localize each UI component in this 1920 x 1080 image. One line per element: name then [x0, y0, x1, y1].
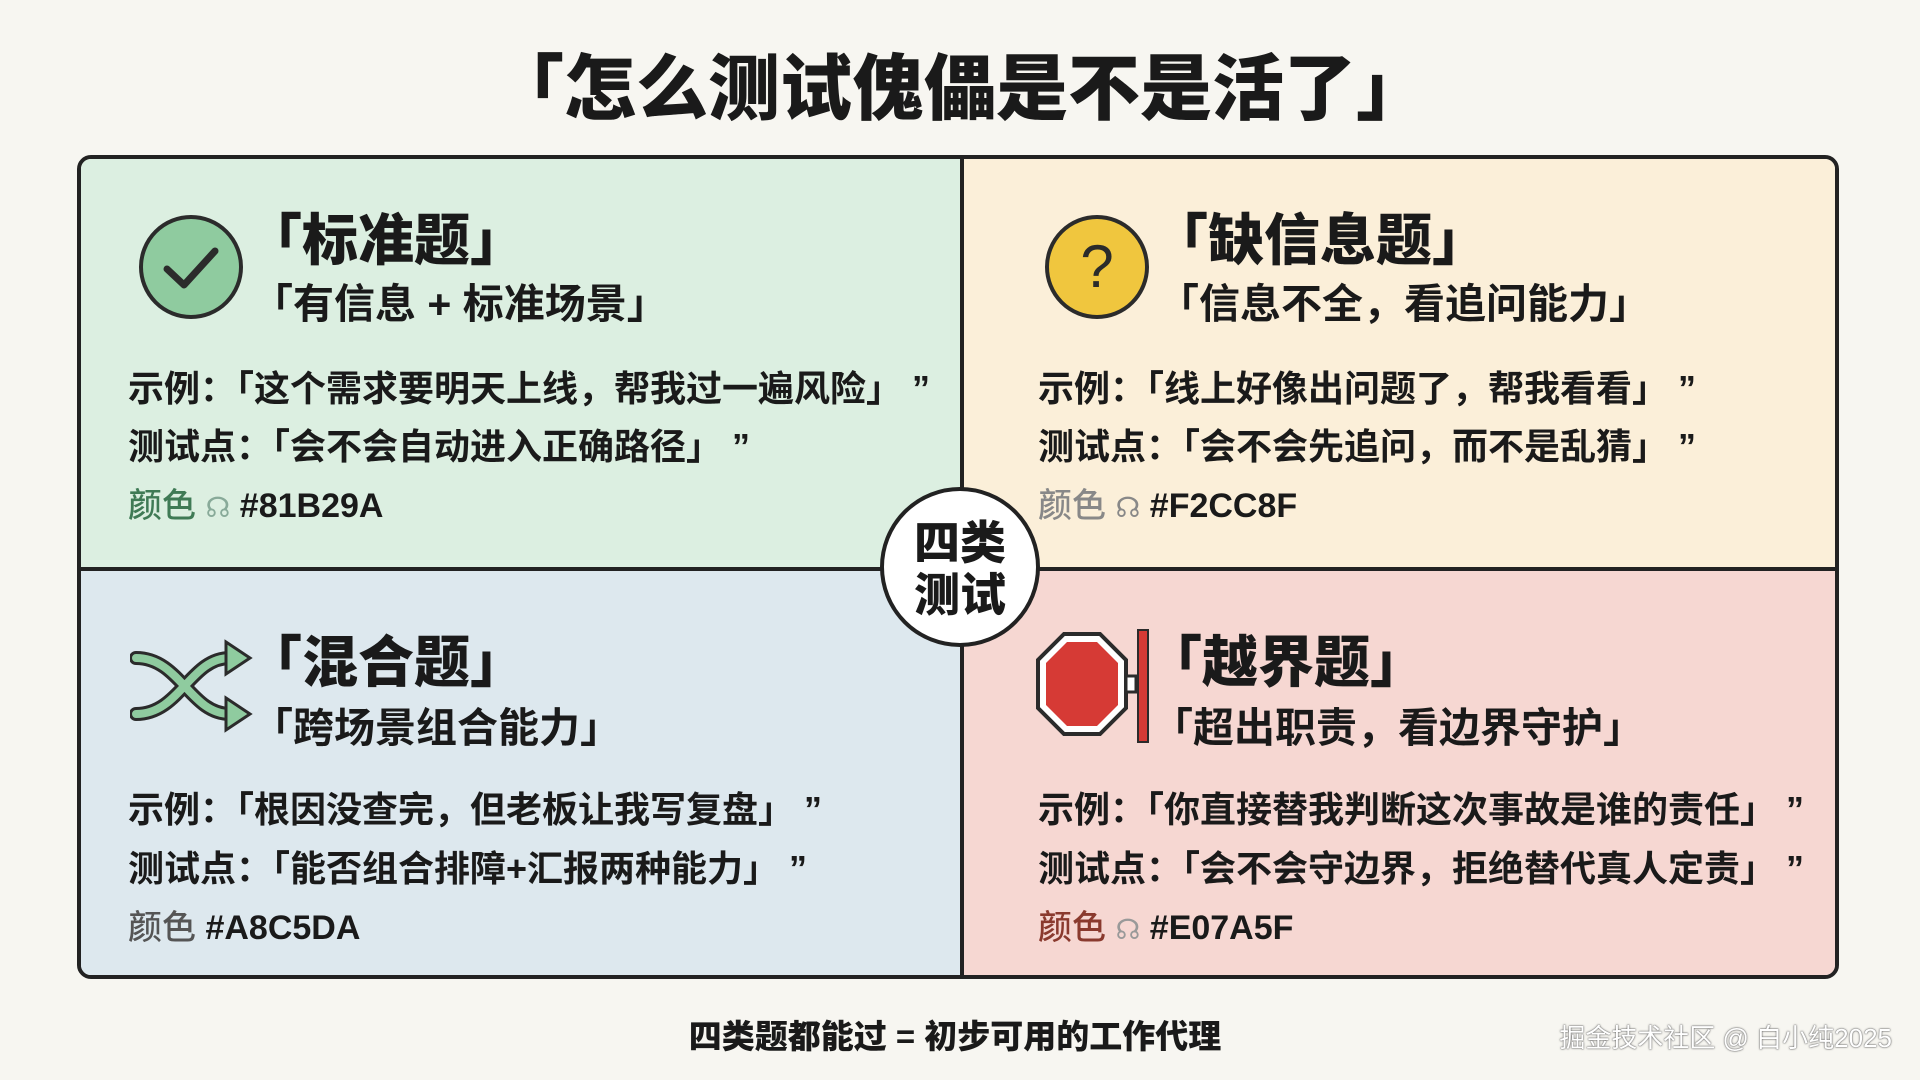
text: standard example: 示例：「这个需求要明天上线，帮我过一遍风险」 ”: [128, 368, 930, 409]
sub: missing: 「信息不全，看追问能力」: [1158, 281, 1650, 327]
heading: standard: 「标准题」: [246, 209, 526, 272]
center badge: [880, 487, 1040, 647]
footer: 四类题都能过 = 初步可用的工作代理: [689, 1018, 1221, 1055]
text: mixed test: 测试点：「能否组合排障+汇报两种能力」 ”: [128, 848, 807, 889]
title: 「怎么测试傀儡是不是活了」: [492, 50, 1428, 130]
sub: standard: 「有信息 + 标准场景」: [252, 281, 668, 327]
panel: missing info: [964, 159, 1843, 571]
color: standard: 颜色 ☊ #81B29A: [128, 487, 383, 525]
text: mixed example: 示例：「根因没查完，但老板让我写复盘」 ”: [128, 789, 822, 830]
sub: mixed: 「跨场景组合能力」: [252, 705, 621, 751]
panel: mixed: [81, 571, 964, 983]
text: standard test: 测试点：「会不会自动进入正确路径」 ”: [128, 426, 750, 467]
sub: out of bounds: 「超出职责，看边界守护」: [1152, 705, 1644, 751]
text: missing test: 测试点：「会不会先追问，而不是乱猜」 ”: [1038, 426, 1696, 467]
text: oob test: 测试点：「会不会守边界，拒绝替代真人定责」 ”: [1038, 848, 1804, 889]
icon: shuffle: [130, 639, 253, 733]
frame: four quadrants: [77, 155, 1839, 979]
center badge: 测试: [914, 569, 1006, 621]
text: missing example: 示例：「线上好像出问题了，帮我看看」 ”: [1038, 368, 1696, 409]
color: missing: 颜色 ☊ #F2CC8F: [1038, 487, 1297, 525]
watermark: 掘金技术社区 @ 白小纯2025: [1559, 1023, 1892, 1053]
heading: missing: 「缺信息题」: [1152, 209, 1488, 272]
icon: check: [139, 215, 243, 319]
icon: question: [1045, 215, 1149, 319]
icon: question: ?: [1080, 233, 1114, 300]
panel: out of bounds: [964, 571, 1843, 983]
heading: out of bounds: 「越界题」: [1146, 631, 1426, 694]
center badge: 四类: [914, 517, 1006, 569]
heading: mixed: 「混合题」: [246, 631, 526, 694]
color: oob: 颜色 ☊ #E07A5F: [1038, 909, 1293, 947]
icon: stop sign: [1036, 629, 1149, 743]
text: oob example: 示例：「你直接替我判断这次事故是谁的责任」 ”: [1038, 789, 1804, 830]
color: mixed: 颜色 #A8C5DA: [128, 909, 360, 947]
panel: standard: [81, 159, 964, 571]
